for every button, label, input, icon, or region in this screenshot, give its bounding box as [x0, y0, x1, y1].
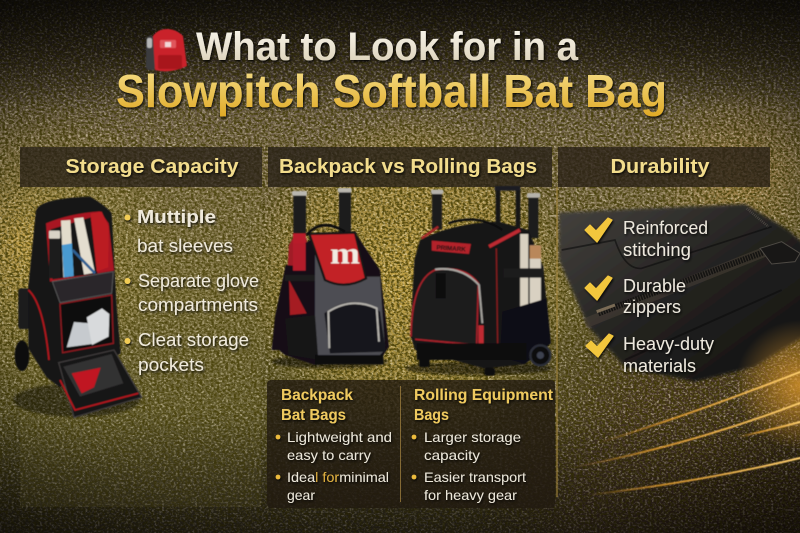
- column: rolling equipment bags: [412, 387, 553, 503]
- image: zipper fabric closeup: [559, 204, 800, 382]
- heading bar: Durability: [610, 156, 710, 178]
- column: rolling equipment bags: for heavy gear: [424, 487, 517, 503]
- icon: red backpack: [146, 29, 187, 71]
- icon: check: [586, 334, 613, 357]
- column: backpack bat bags: gear: [287, 487, 315, 503]
- column: backpack bat bags: Bat Bags: [281, 407, 346, 424]
- title: [116, 25, 667, 117]
- image: backpack bat bag: m: [330, 236, 361, 270]
- item: durable zippers: [623, 276, 686, 317]
- column: rolling equipment bags: capacity: [424, 447, 480, 463]
- bullet list: storage: Separate glove: [138, 270, 259, 291]
- bullet list: storage: Muttiple: [137, 206, 216, 227]
- item: durable zippers: zippers: [623, 297, 681, 317]
- checklist: [585, 218, 714, 376]
- heading bar: [20, 147, 262, 187]
- rule left: [556, 187, 558, 497]
- bullet list: storage: [124, 206, 259, 375]
- bullet list: storage: compartments: [138, 294, 258, 315]
- bullet list: storage: Cleat storage: [138, 329, 249, 350]
- title line 1: What to Look for in a: [196, 25, 579, 69]
- image: rolling equipment bag: PRIMARK: [436, 245, 467, 254]
- open rolling bag: [13, 197, 142, 417]
- column: rolling equipment bags: Larger storage: [424, 429, 521, 445]
- image: backpack bat bag: [272, 188, 389, 368]
- panel frame: [20, 187, 261, 507]
- column: backpack bat bags: Ideal forminimal: [287, 469, 389, 485]
- image: rolling equipment bag: [405, 186, 552, 376]
- bullet list: storage: bat sleeves: [137, 235, 233, 256]
- item: durable zippers: Durable: [623, 276, 686, 296]
- panel: durability: [557, 147, 800, 497]
- heading bar: Storage Capacity: [66, 156, 239, 178]
- heading bar: [268, 147, 552, 187]
- bullet list: storage: pockets: [138, 354, 204, 375]
- icon: check: [585, 276, 612, 300]
- column: rolling equipment bags: Easier transport: [424, 469, 526, 485]
- heading bar: [558, 147, 770, 187]
- heading bar: Backpack vs Rolling Bags: [279, 156, 537, 178]
- column: rolling equipment bags: Bags: [414, 407, 449, 424]
- item: reinforced stitching: Reinforced: [623, 218, 708, 238]
- column: backpack bat bags: Backpack: [281, 387, 353, 404]
- light streaks: [575, 310, 800, 495]
- column: backpack bat bags: easy to carry: [287, 447, 371, 463]
- title line 2: Slowpitch Softball Bat Bag: [116, 65, 667, 117]
- item: heavy-duty materials: [623, 334, 714, 376]
- column: rolling equipment bags: Rolling Equipment: [414, 387, 553, 404]
- panel: storage capacity: [13, 147, 262, 507]
- item: heavy-duty materials: materials: [623, 356, 696, 376]
- item: heavy-duty materials: Heavy-duty: [623, 334, 714, 354]
- icon: check: [585, 218, 612, 242]
- item: reinforced stitching: stitching: [623, 240, 691, 260]
- comparison panel: [267, 380, 555, 508]
- item: reinforced stitching: [623, 218, 708, 260]
- column: backpack bat bags: [276, 387, 392, 503]
- column: backpack bat bags: Lightweight and: [287, 429, 392, 445]
- panel: backpack vs rolling bags: [267, 147, 555, 508]
